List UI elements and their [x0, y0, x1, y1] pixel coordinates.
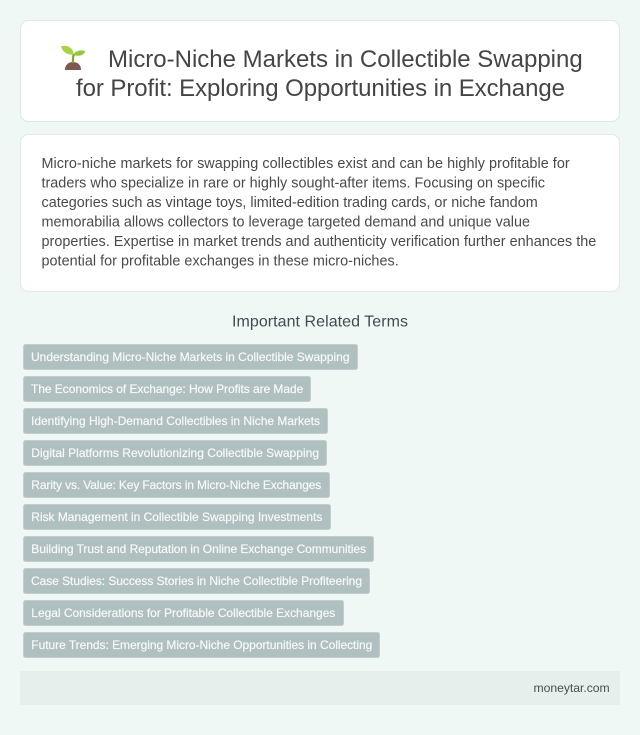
footer — [20, 671, 620, 705]
tag — [24, 536, 374, 562]
tag: Identifying High-Demand Collectibles in Niche Markets — [31, 414, 320, 428]
text block: description: properties. Expertise in market trends and authenticity verification further enhances the — [42, 234, 596, 250]
tag: Case Studies: Success Stories in Niche Collectible Profiteering — [31, 574, 362, 588]
title: for Profit: Exploring Opportunities in Exchange — [76, 75, 565, 102]
tag: Digital Platforms Revolutionizing Collectible Swapping — [31, 446, 319, 460]
text block: description — [42, 156, 596, 269]
list: related term tags — [24, 344, 380, 658]
tag — [24, 408, 328, 434]
tag — [24, 600, 344, 626]
text block: description: potential for profitable exchanges in these micro-niches. — [42, 253, 399, 269]
tag: Building Trust and Reputation in Online Exchange Communities — [31, 542, 366, 556]
text block: description: Micro-niche markets for swapping collectibles exist and can be highly profitable for — [42, 156, 570, 172]
heading: important related terms: Important Related Terms — [232, 314, 408, 330]
text block: description: traders who specialize in rare or highly sought-after items. Focusing on specific — [42, 176, 545, 192]
tag — [24, 504, 330, 530]
tag — [24, 344, 358, 370]
tag — [24, 376, 310, 402]
panel: title header — [20, 20, 620, 122]
tag — [24, 472, 330, 498]
icon: sprout — [61, 46, 85, 70]
tag — [24, 440, 326, 466]
tag: Understanding Micro-Niche Markets in Collectible Swapping — [31, 350, 350, 364]
tag: Risk Management in Collectible Swapping Investments — [31, 510, 322, 524]
tag: Future Trends: Emerging Micro-Niche Opportunities in Collecting — [31, 638, 372, 652]
title — [76, 46, 583, 102]
text block: description: categories such as vintage toys, limited-edition trading cards, or niche fandom — [42, 195, 538, 211]
text block: description: memorabilia allows collectors to leverage targeted demand and unique value — [42, 214, 530, 230]
tag: Rarity vs. Value: Key Factors in Micro-Niche Exchanges — [31, 478, 321, 492]
footer source: moneytar.com — [534, 681, 610, 695]
tag: The Economics of Exchange: How Profits are Made — [31, 382, 304, 396]
panel: description — [20, 134, 620, 292]
tag — [24, 568, 370, 594]
tag: Legal Considerations for Profitable Collectible Exchanges — [31, 606, 335, 620]
tag — [24, 632, 380, 658]
title: Micro-Niche Markets in Collectible Swapping — [108, 46, 583, 73]
